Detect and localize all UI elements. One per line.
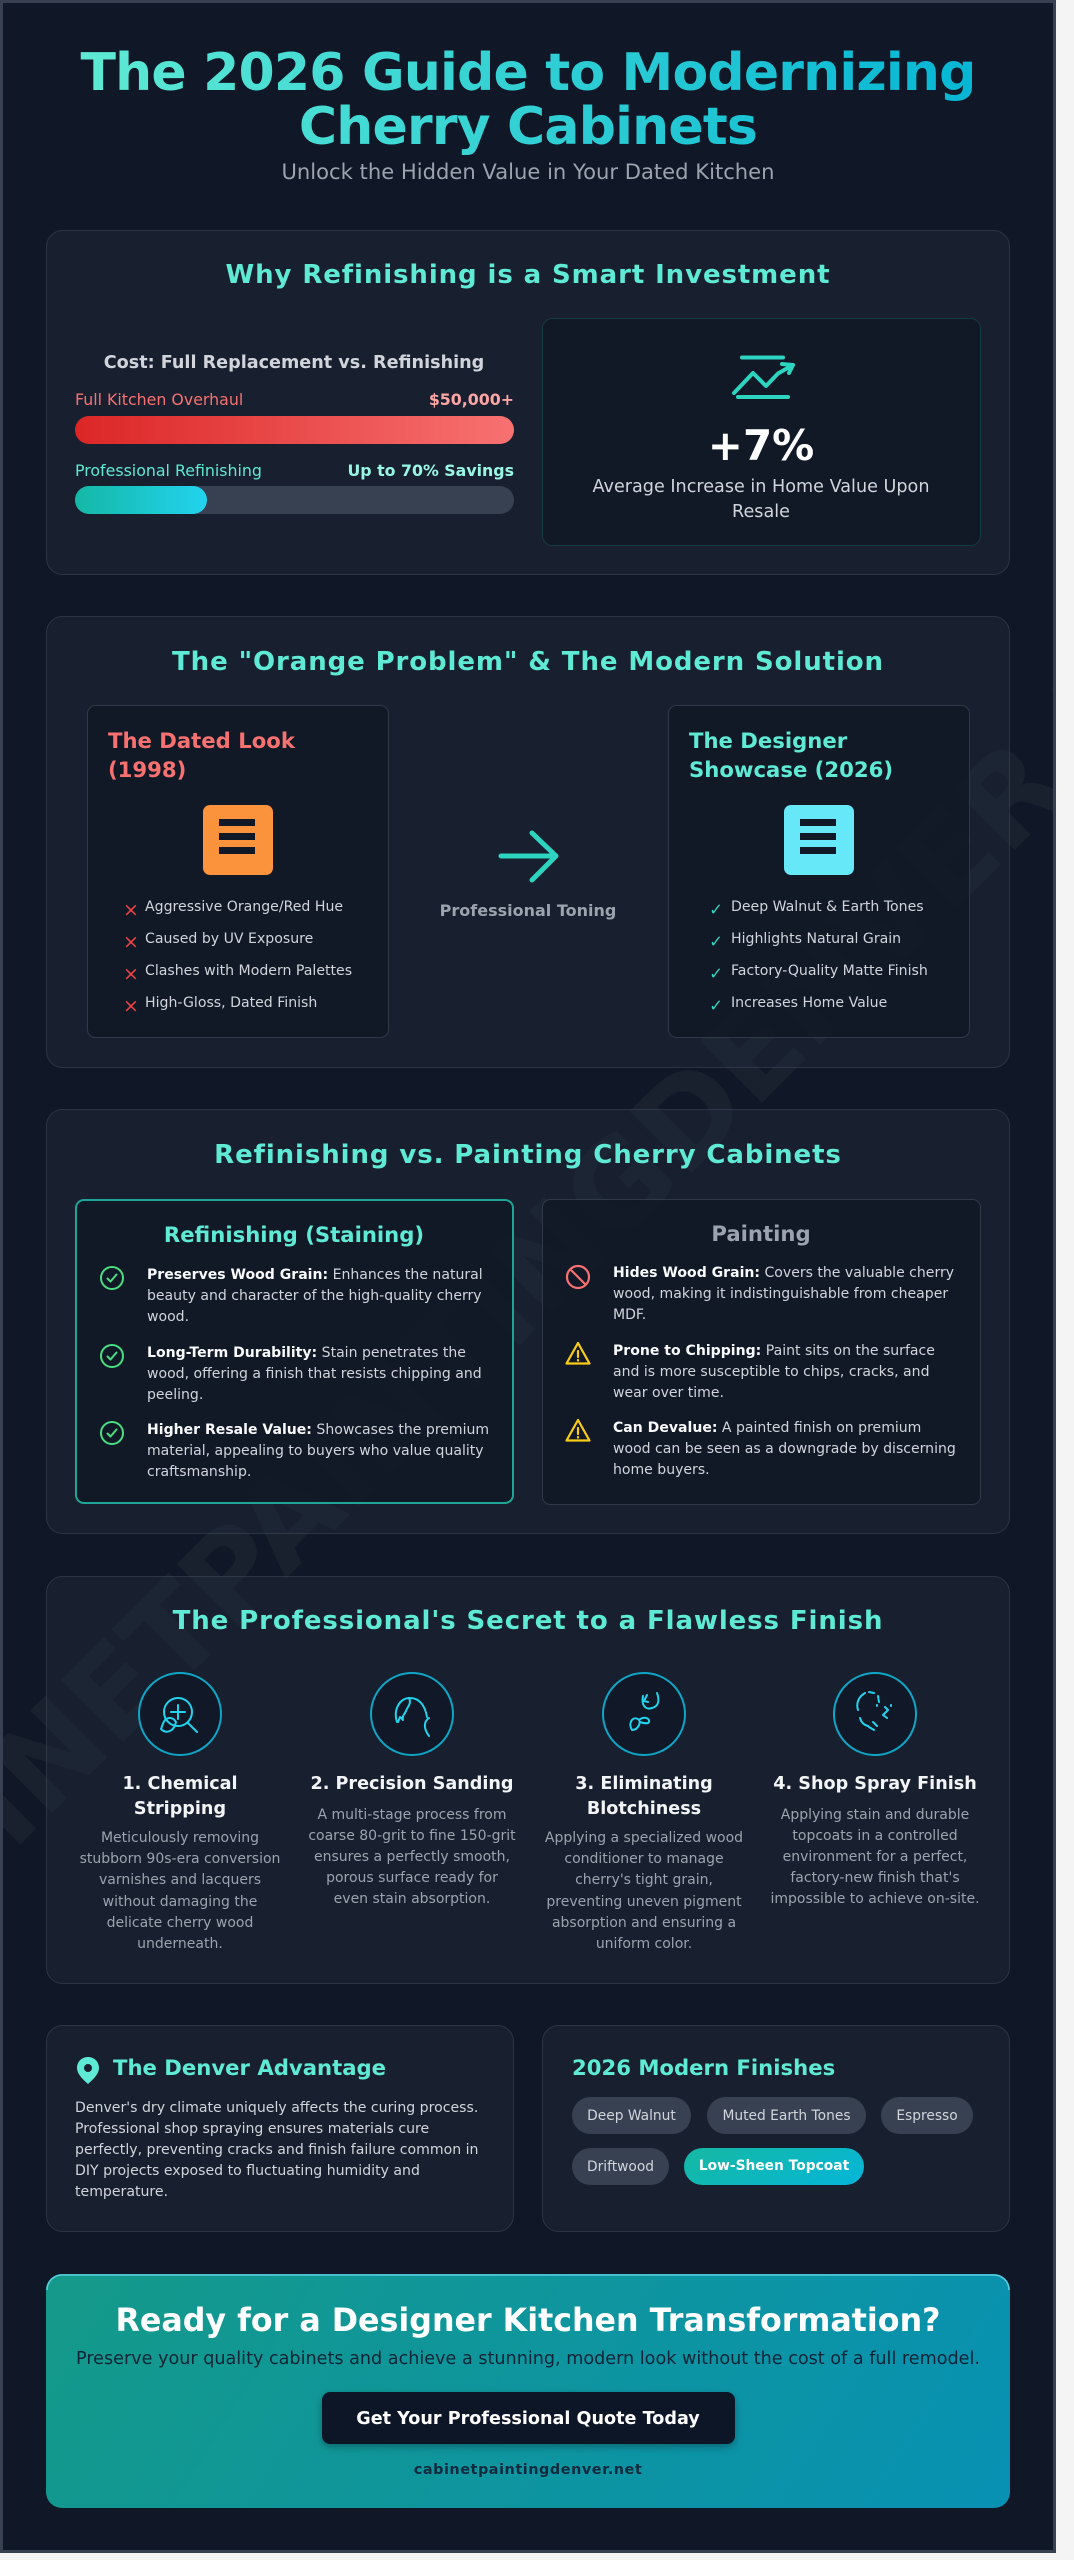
drawback 1: Hides Wood Grain: Covers the valuable cherry <box>613 1265 954 1281</box>
card: painting <box>542 1200 980 1504</box>
card: refinishing: Refinishing (Staining) <box>164 1222 424 1247</box>
designer list: Highlights Natural Grain <box>731 931 901 947</box>
title: The 2026 Guide to Modernizing <box>80 43 976 103</box>
step 2 <box>308 1673 516 1907</box>
step 4: topcoats in a controlled <box>792 1828 958 1844</box>
body text: temperature. <box>75 2184 168 2200</box>
heading: The Denver Advantage <box>113 2055 386 2080</box>
title: Cherry Cabinets <box>299 97 757 157</box>
card: designer showcase: The Designer <box>689 728 848 753</box>
step 4: factory-new finish that's <box>790 1870 960 1886</box>
designer list: ✓ <box>709 996 723 1015</box>
step 3: cherry's tight grain, <box>575 1872 713 1888</box>
step 3: 3. Eliminating <box>575 1774 713 1794</box>
step 1: varnishes and lacquers <box>99 1872 261 1888</box>
designer list: Increases Home Value <box>731 995 887 1011</box>
step 2: even stain absorption. <box>334 1891 490 1907</box>
drawback 1: MDF. <box>613 1307 646 1323</box>
title <box>80 43 976 157</box>
panel: smart investment <box>46 230 1010 574</box>
drawback 1: wood, making it indistinguishable from cheaper <box>613 1286 948 1302</box>
cost comparison chart: $50,000+ <box>429 390 514 409</box>
designer list <box>709 899 928 1015</box>
step 3: absorption and ensuring a <box>552 1915 736 1931</box>
heading: Refinishing vs. Painting Cherry Cabinets <box>214 1140 842 1170</box>
icon: conditioner <box>603 1673 685 1755</box>
icon: orange cabinet <box>203 805 273 875</box>
step 2: ensures a perfectly smooth, <box>314 1849 510 1865</box>
step 3: Applying a specialized wood <box>545 1830 743 1846</box>
cta button <box>322 2392 735 2444</box>
dated look list <box>123 899 352 1017</box>
heading: The Professional's Secret to a Flawless Finish <box>173 1606 883 1636</box>
designer list: ✓ <box>709 900 723 919</box>
website url: cabinetpaintingdenver.net <box>414 2462 642 2478</box>
icon: modern cabinet <box>784 805 854 875</box>
step 3: conditioner to manage <box>564 1851 724 1867</box>
panel: professional process <box>46 1576 1010 1984</box>
benefit 3: craftsmanship. <box>147 1464 251 1480</box>
step 2: coarse 80-grit to fine 150-grit <box>308 1828 516 1844</box>
step 4: environment for a perfect, <box>783 1849 967 1865</box>
step 2: porous surface ready for <box>326 1870 498 1886</box>
icon: spray finish <box>834 1673 916 1755</box>
step 1 <box>80 1673 280 1952</box>
cta text: Preserve your quality cabinets and achieve a stunning, modern look without the cost of a full remodel. <box>76 2349 980 2369</box>
benefit 3: Higher Resale Value: Showcases the premium <box>147 1422 489 1438</box>
benefit 2: peeling. <box>147 1387 203 1403</box>
card: designer showcase <box>668 706 970 1038</box>
body text <box>75 2100 478 2200</box>
step 1: 1. Chemical <box>122 1774 238 1794</box>
cost comparison chart: Up to 70% Savings <box>347 461 514 480</box>
finish chips: Espresso <box>896 2108 958 2124</box>
card: designer showcase: Showcase (2026) <box>689 757 893 782</box>
panel: orange problem <box>46 616 1010 1068</box>
card: dated look: (1998) <box>108 757 186 782</box>
step 3: preventing uneven pigment <box>546 1894 742 1910</box>
arrow: professional toning: Professional Toning <box>440 901 616 920</box>
benefit 1: Preserves Wood Grain: Enhances the natural <box>147 1267 483 1283</box>
heading: The "Orange Problem" & The Modern Solution <box>172 647 884 677</box>
drawback 2: Prone to Chipping: Paint sits on the surface <box>613 1343 935 1359</box>
designer list: ✓ <box>709 932 723 951</box>
body text: Denver's dry climate uniquely affects the curing process. <box>75 2100 478 2116</box>
step 3: uniform color. <box>596 1936 692 1952</box>
dated look list: Clashes with Modern Palettes <box>145 963 352 979</box>
drawback 3: Can Devalue: A painted finish on premium <box>613 1420 921 1436</box>
designer list: ✓ <box>709 964 723 983</box>
step 1: without damaging the <box>103 1894 257 1910</box>
stat card: Resale <box>732 502 790 522</box>
step 4: impossible to achieve on-site. <box>770 1891 980 1907</box>
arrow: professional toning <box>440 833 616 920</box>
step 4: 4. Shop Spray Finish <box>773 1774 977 1794</box>
step 3: Blotchiness <box>587 1799 701 1819</box>
dated look list: × <box>123 931 139 953</box>
cost comparison chart <box>75 353 514 514</box>
drawback 2: wear over time. <box>613 1385 724 1401</box>
cta button: Get Your Professional Quote Today <box>356 2409 700 2429</box>
designer list: Deep Walnut & Earth Tones <box>731 899 924 915</box>
step 2: A multi-stage process from <box>318 1807 506 1823</box>
designer list: Factory-Quality Matte Finish <box>731 963 928 979</box>
benefit 2 <box>101 1345 482 1403</box>
step 4 <box>770 1673 980 1907</box>
finish chips <box>572 2097 973 2185</box>
finish chips: Deep Walnut <box>587 2108 676 2124</box>
step 1: delicate cherry wood <box>107 1915 253 1931</box>
benefit 2: wood, offering a finish that resists chipping and <box>147 1366 482 1382</box>
stat card <box>542 318 980 546</box>
dated look list: × <box>123 995 139 1017</box>
benefit 3 <box>101 1422 489 1480</box>
step 1: Meticulously removing <box>101 1830 259 1846</box>
dated look list: High-Gloss, Dated Finish <box>145 995 317 1011</box>
icon: magnifier and leaf <box>139 1673 221 1755</box>
step 3 <box>545 1673 743 1952</box>
finish chips: Low-Sheen Topcoat <box>699 2158 850 2174</box>
stat card: +7% <box>708 421 814 470</box>
dated look list: × <box>123 963 139 985</box>
drawback 2: and is more susceptible to chips, cracks, and <box>613 1364 930 1380</box>
heading: 2026 Modern Finishes <box>572 2055 835 2080</box>
panel: denver advantage <box>46 2026 514 2232</box>
panel: modern finishes <box>542 2026 1010 2232</box>
finish chips: Driftwood <box>587 2159 654 2175</box>
step 2: 2. Precision Sanding <box>310 1774 514 1794</box>
card: painting: Painting <box>711 1221 811 1246</box>
benefit 1 <box>101 1267 483 1325</box>
card: dated look <box>88 706 388 1038</box>
drawback 3: home buyers. <box>613 1462 710 1478</box>
step 1: underneath. <box>137 1936 223 1952</box>
body text: Professional shop spraying ensures materials cure <box>75 2121 429 2137</box>
cta heading: Ready for a Designer Kitchen Transformation? <box>115 2303 941 2339</box>
icon: map pin <box>77 2057 99 2084</box>
heading: Why Refinishing is a Smart Investment <box>226 260 830 290</box>
dated look list: Caused by UV Exposure <box>145 931 313 947</box>
step 1: stubborn 90s-era conversion <box>80 1851 280 1867</box>
icon: sanding <box>371 1673 453 1755</box>
cost comparison chart: Full Kitchen Overhaul <box>75 390 243 409</box>
benefit 2: Long-Term Durability: Stain penetrates the <box>147 1345 466 1361</box>
panel: refinishing vs painting <box>46 1110 1010 1534</box>
dated look list: × <box>123 899 139 921</box>
cost comparison chart: Professional Refinishing <box>75 461 262 480</box>
card: refinishing <box>76 1200 513 1503</box>
benefit 1: wood. <box>147 1309 189 1325</box>
drawback 1 <box>567 1265 954 1323</box>
body text: perfectly, preventing cracks and finish failure common in <box>75 2142 478 2158</box>
step 4: Applying stain and durable <box>781 1807 969 1823</box>
body text: DIY projects exposed to fluctuating humidity and <box>75 2163 420 2179</box>
card: dated look: The Dated Look <box>108 728 296 753</box>
call to action <box>46 2274 1010 2508</box>
dated look list: Aggressive Orange/Red Hue <box>145 899 343 915</box>
drawback 3 <box>566 1420 956 1478</box>
benefit 1: beauty and character of the high-quality cherry <box>147 1288 482 1304</box>
drawback 3: wood can be seen as a downgrade by discerning <box>613 1441 956 1457</box>
benefit 3: material, appealing to buyers who value quality <box>147 1443 484 1459</box>
drawback 2 <box>566 1343 935 1401</box>
cost comparison chart: Cost: Full Replacement vs. Refinishing <box>104 353 484 373</box>
icon: rising chart <box>734 358 793 397</box>
step 1: Stripping <box>134 1799 226 1819</box>
finish chips: Muted Earth Tones <box>722 2108 851 2124</box>
stat card: Average Increase in Home Value Upon <box>593 477 929 497</box>
subtitle: Unlock the Hidden Value in Your Dated Kitchen <box>281 159 775 184</box>
